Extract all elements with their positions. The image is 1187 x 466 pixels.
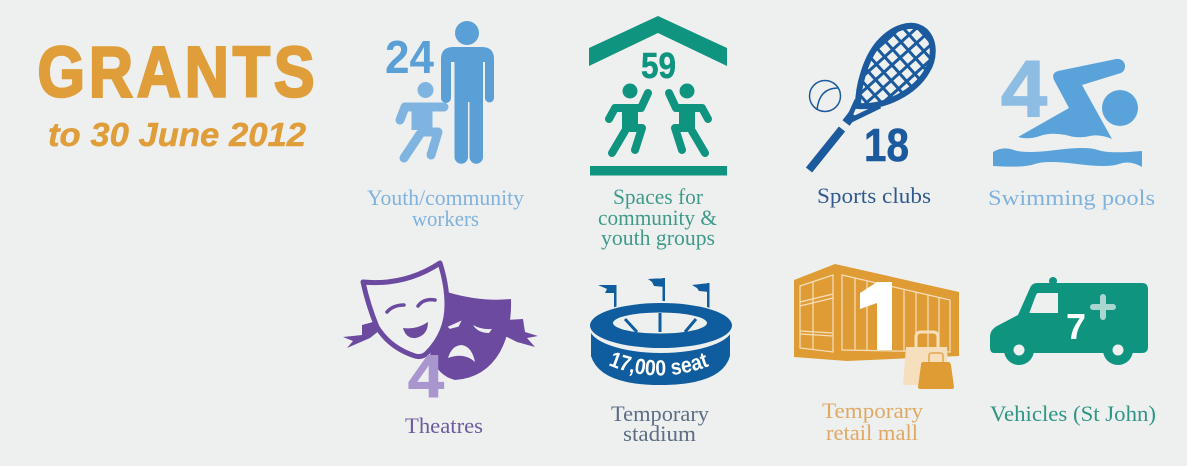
- label: [367, 185, 524, 231]
- panel: spaces for community & youth groups: [589, 16, 727, 250]
- icon: tennis racket: [806, 22, 936, 172]
- number: 4: 4: [408, 343, 445, 410]
- icon: sad mask: [430, 292, 511, 380]
- title: [38, 33, 318, 153]
- icon: ribbons: [343, 319, 538, 348]
- label: Temporary: [611, 401, 709, 426]
- label: workers: [412, 206, 479, 231]
- panel: swimming pools: [988, 44, 1155, 210]
- icon: happy mask: [363, 263, 447, 357]
- panel: theatres: [343, 263, 538, 438]
- icon: mall building: [794, 264, 959, 361]
- label: Theatres: [405, 413, 483, 438]
- label: [611, 401, 709, 446]
- icon: child: [400, 82, 444, 158]
- panel: youth/community workers: [367, 21, 524, 231]
- number: 24: 24: [385, 31, 434, 83]
- label: Sports clubs: [817, 183, 931, 208]
- number: 18: 18: [864, 119, 909, 171]
- number: 1: 1: [855, 264, 908, 371]
- label: [822, 398, 923, 445]
- panel: sports clubs: [806, 22, 936, 208]
- label: stadium: [623, 421, 696, 446]
- number: 59: 59: [641, 45, 676, 86]
- label: [598, 184, 717, 250]
- label: Youth/community: [367, 185, 524, 210]
- label: Temporary: [822, 398, 923, 423]
- icon: floor: [590, 166, 727, 176]
- number: 1: [860, 282, 892, 350]
- icon: swimmer: [993, 59, 1142, 167]
- number: 7: 7: [1066, 306, 1086, 347]
- icon: stadium bowl: [589, 301, 733, 385]
- label: community &: [598, 205, 717, 230]
- number: 4: 4: [1001, 44, 1048, 133]
- icon: ambulance: [990, 277, 1148, 365]
- icon: shopping bags: [903, 332, 954, 389]
- panel: vehicles (St John): [990, 277, 1156, 426]
- label: Swimming pools: [988, 185, 1155, 210]
- icon: flags: [598, 278, 710, 311]
- panel: temporary retail mall: [794, 264, 959, 445]
- icon: adult: [441, 21, 494, 164]
- label: youth groups: [601, 225, 715, 250]
- heading: GRANTS: GRANTS: [38, 33, 318, 113]
- icon: roof: [589, 16, 727, 66]
- subheading: date: to 30 June 2012: [48, 116, 307, 153]
- icon: tennis ball: [810, 80, 840, 112]
- label: retail mall: [826, 420, 918, 445]
- icon: right figure: [669, 84, 708, 153]
- stadium text: 17,000 seat: [609, 352, 710, 376]
- icon: left figure: [609, 84, 648, 153]
- label: Vehicles (St John): [990, 401, 1156, 426]
- icon: mask faces: [387, 300, 492, 362]
- label: Spaces for: [613, 184, 704, 209]
- panel: temporary stadium: [590, 278, 732, 446]
